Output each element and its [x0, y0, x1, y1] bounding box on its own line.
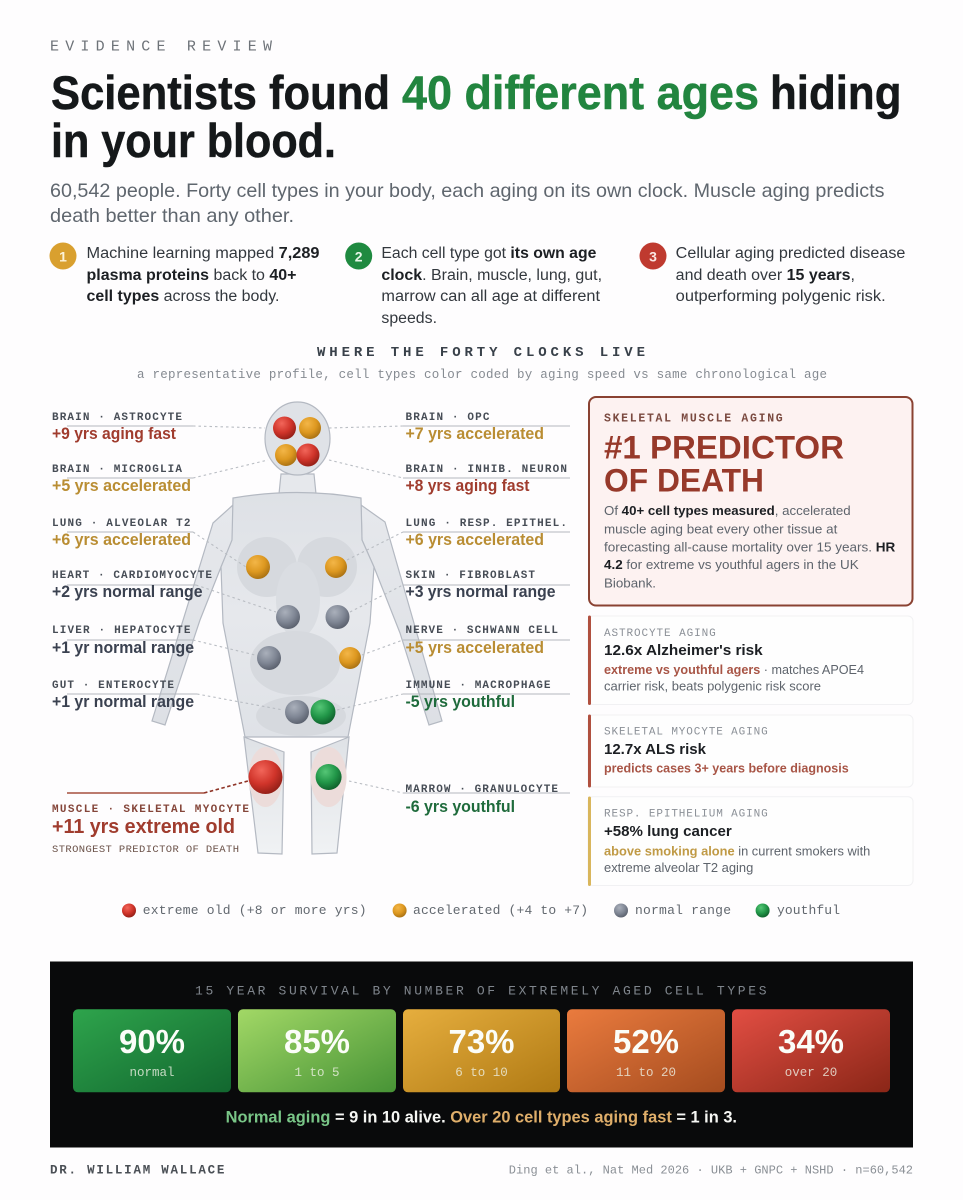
card label: ASTROCYTE AGING: [604, 628, 716, 640]
label: skeletal myocyte: [52, 781, 249, 856]
head: [265, 402, 330, 475]
legend: normal range: normal range: [635, 903, 731, 918]
eyebrow: evidence review: EVIDENCE REVIEW: [50, 38, 272, 56]
survival card: 1 to 5: 85%: [284, 1023, 350, 1060]
card detail: [604, 662, 864, 694]
label: microglia: +5 yrs accelerated: [52, 477, 191, 495]
label: hepatocyte: LIVER · HEPATOCYTE: [52, 625, 191, 637]
label: inhibitory neuron: BRAIN · INHIB. NEURON: [406, 464, 567, 476]
card detail: predicts cases 3+ years before diagnosis: [604, 761, 849, 776]
survival card: normal: [73, 1009, 231, 1092]
card label: SKELETAL MYOCYTE AGING: [604, 727, 768, 739]
marker: skeletal myocyte: [248, 760, 282, 794]
label: astrocyte: [52, 412, 265, 443]
panel: survival strip: [50, 962, 913, 1148]
label: fibroblast: [350, 570, 570, 612]
card label: RESP. EPITHELIUM AGING: [604, 809, 768, 821]
marker: enterocyte: [285, 700, 309, 724]
organ regions: [237, 537, 357, 807]
title: Scientists found: [51, 66, 390, 119]
label: schwann cell: NERVE · SCHWANN CELL: [406, 625, 558, 637]
callout headline: #1 PREDICTOR: [604, 430, 844, 466]
legend: youthful: youthful: [777, 903, 840, 918]
text 2: clock. Brain, muscle, lung, gut,: [381, 267, 602, 284]
text 3: Cellular aging predicted disease: [676, 245, 905, 262]
title: hiding: [770, 66, 902, 119]
label: skeletal myocyte: STRONGEST PREDICTOR OF DEATH: [52, 844, 239, 856]
survival card: 11 to 20: 52%: [613, 1023, 679, 1060]
label: OPC: +7 yrs accelerated: [406, 425, 544, 443]
right arm: [361, 505, 442, 725]
neck: [279, 474, 316, 494]
text 3: outperforming polygenic risk.: [676, 288, 886, 305]
callout body: 4.2 for extreme vs youthful agers in the UK: [604, 557, 859, 572]
panel: astrocyte aging: [588, 616, 913, 704]
callout body: Of 40+ cell types measured, accelerated: [604, 503, 851, 518]
label: schwann cell: [362, 625, 570, 657]
label: alveolar T2: LUNG · ALVEOLAR T2: [52, 518, 190, 530]
survival card: over 20: over 20: [785, 1066, 837, 1080]
label: granulocyte: MARROW · GRANULOCYTE: [406, 784, 558, 796]
label: enterocyte: [52, 680, 283, 711]
marker: hepatocyte: [257, 646, 281, 670]
title: in your blood.: [51, 114, 336, 167]
text 2: speeds.: [381, 310, 437, 327]
survival card: 6 to 10: [403, 1009, 560, 1092]
badge 3: 3: [649, 248, 657, 264]
label: granulocyte: -6 yrs youthful: [406, 798, 515, 816]
takeaway sentence: Normal aging = 9 in 10 alive. Over 20 cell types aging fast = 1 in 3.: [226, 1108, 737, 1126]
subtitle: [50, 180, 885, 227]
badge 2: 2: [355, 248, 363, 264]
label: schwann cell: +5 yrs accelerated: [406, 639, 544, 657]
body diagram: [152, 402, 442, 854]
legend: accelerated: accelerated (+4 to +7): [413, 903, 588, 918]
key point 1: [50, 242, 320, 305]
callout body: muscle aging beat every other tissue at: [604, 521, 838, 536]
marker: astrocyte: [273, 416, 296, 440]
subtitle: 60,542 people. Forty cell types in your body, each aging on its own clock. Muscle aging predicts: [50, 180, 885, 202]
label: hepatocyte: [52, 625, 255, 657]
label: cardiomyocyte: +2 yrs normal range: [52, 583, 202, 601]
badge 1: [50, 242, 76, 270]
survival card: normal: 90%: [119, 1023, 185, 1060]
footer author: DR. WILLIAM WALLACE: [50, 1163, 224, 1177]
label: alveolar T2: [52, 518, 246, 567]
label: microglia: BRAIN · MICROGLIA: [52, 464, 182, 476]
card: [588, 797, 913, 886]
label: hepatocyte: +1 yr normal range: [52, 639, 194, 657]
panel: skeletal muscle callout: [589, 397, 912, 606]
survival card: 1 to 5: [238, 1009, 396, 1092]
label: OPC: BRAIN · OPC: [406, 412, 490, 424]
text 1: Machine learning mapped 7,289: [86, 245, 320, 262]
label: respiratory epithelium: [347, 518, 570, 560]
callout headline: OF DEATH: [604, 462, 764, 498]
marker: OPC: [299, 417, 321, 439]
text 1: plasma proteins back to 40+: [86, 267, 296, 284]
survival card: 6 to 10: 6 to 10: [455, 1066, 508, 1080]
label: cardiomyocyte: HEART · CARDIOMYOCYTE: [52, 570, 212, 582]
title: 40 different ages: [402, 66, 759, 119]
survival card: 1 to 5: 1 to 5: [294, 1066, 340, 1080]
title: [51, 66, 902, 167]
badge 1: 1: [59, 248, 67, 264]
marker: cardiomyocyte: [276, 605, 300, 629]
cell type markers: [246, 416, 361, 794]
label: granulocyte: [349, 781, 570, 816]
callout headline: [604, 430, 844, 498]
panel: skeletal myocyte aging: [588, 715, 913, 787]
section heading: WHERE THE FORTY CLOCKS LIVE: [317, 345, 645, 361]
label: cardiomyocyte: [52, 570, 276, 612]
text 2: Each cell type got its own age: [381, 245, 597, 262]
left leg: [244, 737, 284, 854]
survival card: 6 to 10: 73%: [448, 1023, 515, 1060]
callout body: Biobank.: [604, 575, 656, 590]
panel background: [50, 962, 913, 1148]
survival card: over 20: 34%: [778, 1023, 844, 1060]
key point 3: [640, 242, 905, 305]
left arm: [152, 505, 233, 725]
survival card: 11 to 20: [567, 1009, 725, 1092]
survival card: 11 to 20: 11 to 20: [616, 1066, 676, 1080]
section subheading: a representative profile, cell types color coded by aging speed vs same chronological age: [137, 368, 827, 382]
right leg: [311, 737, 349, 854]
survival card: over 20: [732, 1009, 890, 1092]
label: inhibitory neuron: [329, 460, 570, 495]
label: macrophage: [337, 680, 570, 711]
label: alveolar T2: +6 yrs accelerated: [52, 531, 191, 549]
card: [588, 616, 913, 704]
footer source: Ding et al., Nat Med 2026 · UKB + GNPC + NSHD · n=60,542: [509, 1163, 913, 1177]
text 2: [381, 245, 602, 327]
subtitle: death better than any other.: [50, 205, 294, 227]
card detail: [604, 843, 870, 875]
text 3: [676, 245, 905, 305]
card: [588, 715, 913, 787]
label: enterocyte: +1 yr normal range: [52, 693, 194, 711]
card detail: carrier risk, beats polygenic risk score: [604, 679, 821, 694]
card detail: extreme alveolar T2 aging: [604, 860, 753, 875]
marker: alveolar T2: [246, 555, 270, 579]
label: astrocyte: BRAIN · ASTROCYTE: [52, 412, 182, 424]
label: fibroblast: SKIN · FIBROBLAST: [406, 570, 535, 582]
panel heading: 15 YEAR SURVIVAL BY NUMBER OF EXTREMELY AGED CELL TYPES: [195, 983, 767, 998]
marker: microglia: [275, 444, 297, 466]
marker: inhibitory neuron: [296, 444, 320, 466]
label: skeletal myocyte: MUSCLE · SKELETAL MYOCYTE: [52, 804, 249, 816]
label: microglia: [52, 460, 268, 495]
label: macrophage: IMMUNE · MACROPHAGE: [406, 680, 551, 692]
callout eyebrow: SKELETAL MUSCLE AGING: [604, 412, 783, 426]
callout box: [589, 397, 912, 606]
label: OPC: [329, 412, 570, 443]
marker: granulocyte: [316, 764, 342, 790]
marker: macrophage: [310, 700, 336, 724]
label: macrophage: -5 yrs youthful: [406, 693, 515, 711]
label: inhibitory neuron: +8 yrs aging fast: [406, 477, 530, 495]
marker: fibroblast: [326, 605, 350, 629]
text 3: and death over 15 years,: [676, 267, 855, 284]
label: respiratory epithelium: LUNG · RESP. EPITHEL.: [406, 518, 567, 530]
card headline: 12.7x ALS risk: [604, 741, 707, 758]
key point 2: [345, 242, 602, 327]
badge 3: [640, 242, 666, 270]
marker: schwann cell: [339, 647, 361, 669]
callout body: forecasting all-cause mortality over 15 years. HR: [604, 539, 896, 554]
text 2: marrow can all age at different: [381, 288, 601, 305]
panel: respiratory epithelium aging: [588, 797, 913, 886]
legend: [122, 903, 840, 918]
label: respiratory epithelium: +6 yrs accelerated: [406, 531, 544, 549]
text 1: [86, 245, 320, 305]
card headline: 12.6x Alzheimer's risk: [604, 642, 763, 659]
legend: extreme old: extreme old (+8 or more yrs): [143, 903, 367, 918]
marker: respiratory epithelium: [325, 556, 347, 578]
card headline: +58% lung cancer: [604, 823, 732, 840]
survival card: normal: normal: [129, 1066, 175, 1080]
callout body: [604, 503, 896, 590]
label: fibroblast: +3 yrs normal range: [406, 583, 556, 601]
label: astrocyte: +9 yrs aging fast: [52, 425, 176, 443]
badge 2: [345, 242, 372, 270]
label: enterocyte: GUT · ENTEROCYTE: [52, 680, 174, 692]
card detail: above smoking alone in current smokers with: [604, 843, 870, 858]
torso: [221, 492, 374, 737]
label: skeletal myocyte: +11 yrs extreme old: [52, 816, 235, 838]
card detail: extreme vs youthful agers · matches APOE4: [604, 662, 864, 677]
text 1: cell types across the body.: [86, 288, 280, 305]
